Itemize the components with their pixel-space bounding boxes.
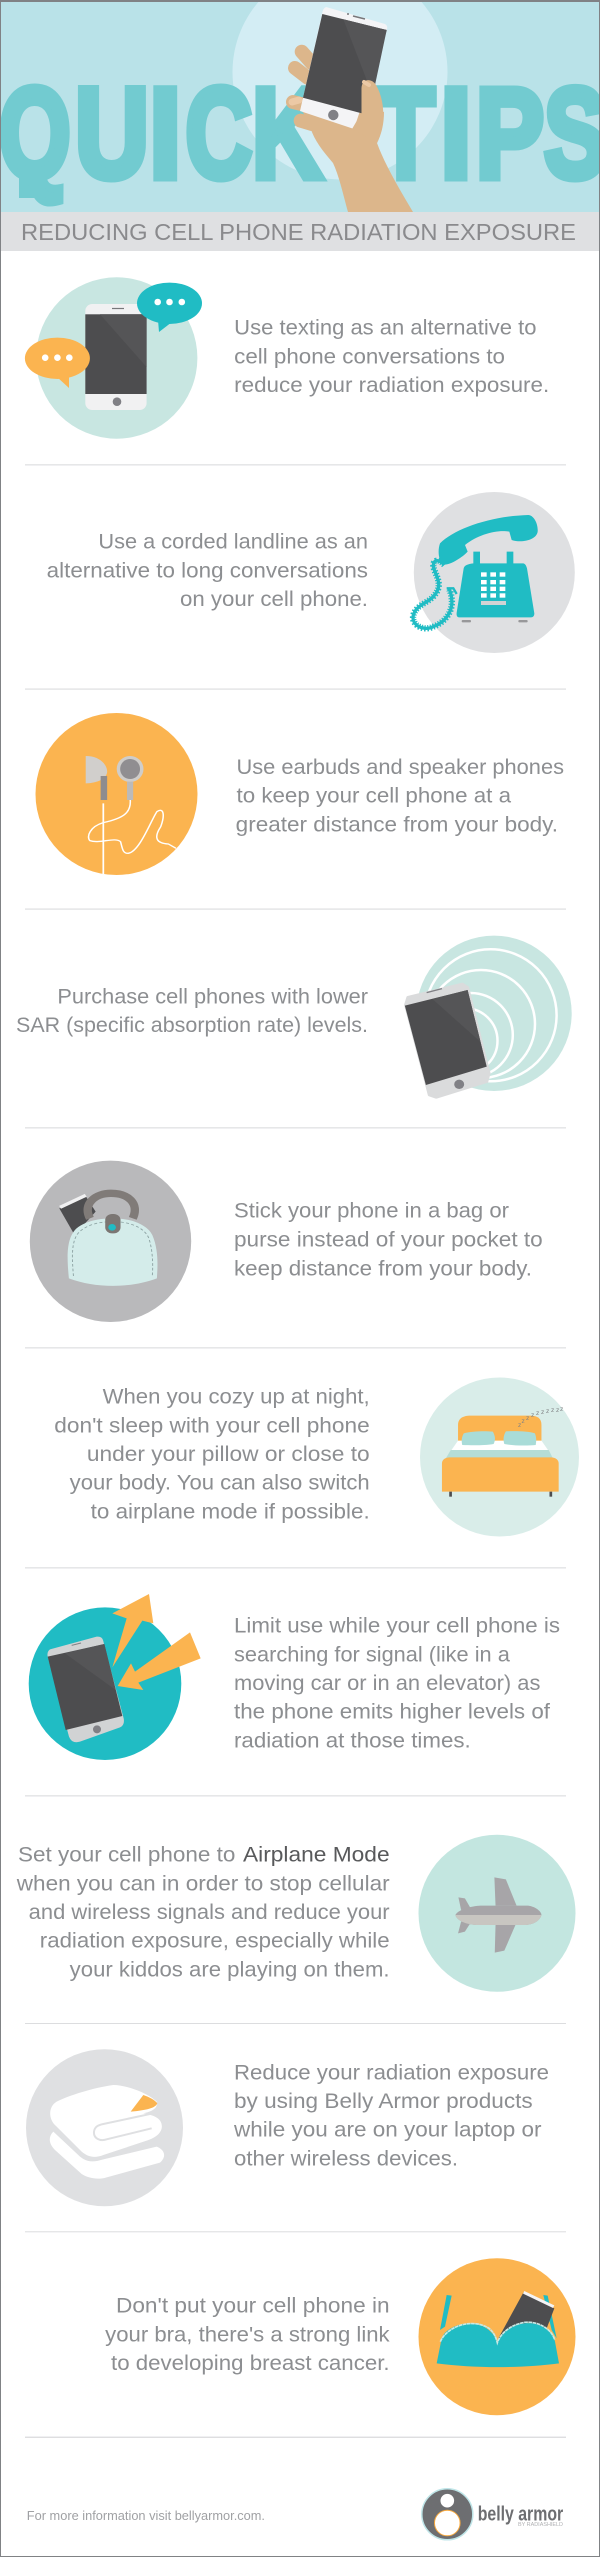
text: bra tip: Don't put your cell phone in bbox=[116, 2293, 390, 2317]
header panel bbox=[0, 0, 600, 212]
text: signal tip: searching for signal (like in a bbox=[234, 1642, 510, 1666]
title: QUICK TIPS: I bbox=[149, 62, 181, 205]
panel: sleeping bbox=[54, 1378, 579, 1536]
text: sleep tip: under your pillow or close to bbox=[87, 1442, 370, 1466]
text: earbuds tip: to keep your cell phone at a bbox=[236, 784, 511, 808]
text: texting tip: cell phone conversations to bbox=[234, 344, 505, 368]
panel: landline bbox=[47, 492, 575, 653]
panel: Belly Armor products bbox=[26, 2049, 555, 2206]
text: bra tip: your bra, there's a strong link bbox=[105, 2322, 390, 2346]
text: Belly Armor tip: other wireless devices. bbox=[234, 2146, 458, 2170]
zzz snore text: zzzzzzzzzz bbox=[518, 1406, 563, 1429]
title: QUICK TIPS: C bbox=[186, 62, 252, 205]
icon: hand holding phone bbox=[292, 7, 413, 212]
text: Belly Armor tip: by using Belly Armor products bbox=[234, 2089, 533, 2113]
text: airplane mode tip: and wireless signals and reduce your bbox=[29, 1900, 390, 1924]
panel: bra warning bbox=[105, 2258, 575, 2415]
text: Belly Armor tip: Reduce your radiation exposure bbox=[234, 2060, 549, 2084]
panel: airplane mode bbox=[16, 1835, 576, 1992]
icon: phone with speech bubbles bbox=[25, 277, 202, 439]
panel: earbuds bbox=[36, 713, 570, 875]
title: QUICK TIPS: K bbox=[252, 63, 322, 206]
text: landline tip: Use a corded landline as an bbox=[98, 529, 368, 553]
text: signal tip: moving car or in an elevator) as bbox=[234, 1671, 540, 1695]
text: signal tip: radiation at those times. bbox=[234, 1728, 471, 1752]
text: earbuds tip: greater distance from your body. bbox=[236, 813, 558, 837]
panel: low SAR phones bbox=[16, 936, 572, 1097]
text: texting tip: reduce your radiation exposure. bbox=[234, 373, 549, 397]
text: landline tip: alternative to long conversations bbox=[47, 558, 368, 582]
icon: earbuds bbox=[36, 713, 198, 875]
icon: phone emitting signal waves bbox=[405, 936, 572, 1097]
panel: texting bbox=[25, 277, 549, 439]
icon: bed bbox=[420, 1378, 579, 1536]
icon: bra with phone bbox=[418, 2258, 576, 2415]
title: QUICK TIPS: I bbox=[440, 62, 471, 205]
logo: Belly Armor bbox=[422, 2489, 563, 2540]
title: QUICK TIPS: T bbox=[377, 62, 435, 205]
text: SAR tip: Purchase cell phones with lower bbox=[57, 984, 368, 1008]
text: airplane mode tip: radiation exposure, especially while bbox=[40, 1929, 390, 1953]
title: QUICK TIPS bbox=[0, 62, 600, 206]
title: QUICK TIPS: Q bbox=[0, 62, 71, 205]
text: Belly Armor tip: while you are on your laptop or bbox=[233, 2118, 542, 2142]
text: bag tip: keep distance from your body. bbox=[234, 1257, 532, 1281]
text: bag tip: Stick your phone in a bag or bbox=[234, 1198, 509, 1222]
icon: airplane bbox=[418, 1835, 576, 1992]
text: airplane mode tip: Airplane Mode bbox=[243, 1843, 390, 1867]
text: airplane mode tip: Set your cell phone to bbox=[18, 1843, 235, 1867]
text: airplane mode tip: your kiddos are playing on them. bbox=[70, 1958, 390, 1982]
text: SAR tip: SAR (specific absorption rate) levels. bbox=[16, 1013, 368, 1037]
text: sleep tip: When you cozy up at night, bbox=[103, 1384, 370, 1408]
icon: folded blankets bbox=[26, 2049, 183, 2206]
text: earbuds tip: Use earbuds and speaker phones bbox=[236, 755, 564, 779]
text: signal tip: the phone emits higher levels of bbox=[234, 1700, 550, 1724]
logo: Belly Armor: belly armor bbox=[478, 2504, 563, 2526]
logo: Belly Armor: BY RADIASHIELD bbox=[518, 2522, 563, 2528]
text: texting tip: Use texting as an alternative to bbox=[234, 316, 537, 340]
header light circle bbox=[232, 0, 448, 180]
panel: searching for signal bbox=[29, 1594, 566, 1760]
subtitle band: REDUCING CELL PHONE RADIATION EXPOSURE bbox=[21, 219, 576, 245]
text: sleep tip: don't sleep with your cell phone bbox=[54, 1413, 370, 1437]
icon: corded telephone bbox=[413, 492, 575, 653]
text: airplane mode tip: when you can in order to stop cellular bbox=[16, 1871, 390, 1895]
text: sleep tip: to airplane mode if possible. bbox=[91, 1499, 370, 1523]
text: bra tip: to developing breast cancer. bbox=[111, 2351, 390, 2375]
text: more information: For more information visit bellyarmor.com. bbox=[27, 2508, 265, 2523]
icon: phone with signal arrows bbox=[29, 1594, 201, 1760]
footer bbox=[27, 2489, 563, 2540]
title: QUICK TIPS: P bbox=[476, 62, 544, 205]
text: bag tip: purse instead of your pocket to bbox=[234, 1228, 543, 1252]
text: landline tip: on your cell phone. bbox=[180, 587, 368, 611]
title: QUICK TIPS: U bbox=[75, 62, 149, 205]
text: signal tip: Limit use while your cell phone is bbox=[234, 1614, 560, 1638]
subtitle band bbox=[0, 212, 600, 251]
panel: bag or purse bbox=[30, 1161, 549, 1322]
text: sleep tip: your body. You can also switch bbox=[70, 1471, 370, 1495]
icon: handbag with phone bbox=[30, 1161, 191, 1322]
